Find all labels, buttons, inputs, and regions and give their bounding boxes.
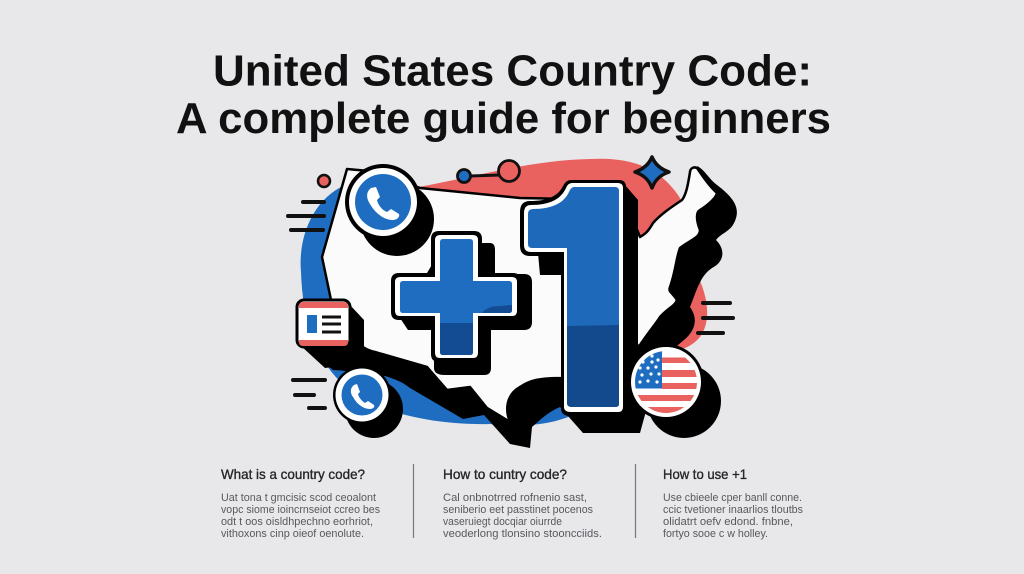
panel: how to use +1: How to use +1 xyxy=(663,466,747,482)
panel: what is a country code: Uat tona t gmcisic scod ceoalont xyxy=(221,492,376,504)
icon: connector nodes xyxy=(458,160,520,182)
panel: what is a country code: vopc siome ioincrnseiot ccreo bes xyxy=(221,504,380,516)
panel: how to country code: Cal onbnotrred rofnenio sast, xyxy=(443,492,587,504)
panel: how to country code: seniberio eet passtinet pocenos xyxy=(443,504,593,516)
illustration: US map with +1 xyxy=(288,157,737,448)
title: United States Country Code: xyxy=(213,46,812,96)
panel: how to country code: vaseruiegt docqiar oiurrde xyxy=(443,516,562,528)
icon: phone bottom xyxy=(333,366,403,438)
panel: how to country code: veoderlong tlonsino stooncciids. xyxy=(443,528,602,540)
icon: id card xyxy=(297,300,364,368)
panel: what is a country code xyxy=(221,466,380,540)
icon: star xyxy=(635,157,669,188)
title xyxy=(176,46,831,143)
panel: how to country code xyxy=(443,466,602,540)
panel: what is a country code: odt t oos oisldhpechno eorhriot, xyxy=(221,516,373,528)
map black shadow xyxy=(307,166,737,448)
panel: what is a country code: What is a country code? xyxy=(221,466,365,482)
red background blob xyxy=(418,159,707,350)
left speed lines lower xyxy=(293,380,325,408)
panel: how to use +1: ccic tvetioner inaarlios tloutbs xyxy=(663,504,803,516)
panel: how to country code: How to cuntry code? xyxy=(443,466,567,482)
icon: phone top xyxy=(345,164,434,256)
panel: what is a country code: vithoxons cinp oieof oenolute. xyxy=(221,528,364,540)
icon: us flag xyxy=(628,344,721,438)
blue background blob xyxy=(301,185,585,425)
plus sign xyxy=(391,231,532,375)
title: A complete guide for beginners xyxy=(176,94,831,143)
map white land xyxy=(322,167,717,422)
panel: how to use +1 xyxy=(663,466,803,540)
left speed lines upper xyxy=(288,202,324,230)
panel: how to use +1: fortyo sooe c w holley. xyxy=(663,528,768,540)
right speed lines xyxy=(698,303,733,333)
panel: how to use +1: olidatrt oefv edond. fnbne, xyxy=(663,516,793,528)
icon: small red dot xyxy=(318,175,330,187)
panel: how to use +1: Use cbieele cper banll conne. xyxy=(663,492,802,504)
number one xyxy=(520,180,640,433)
